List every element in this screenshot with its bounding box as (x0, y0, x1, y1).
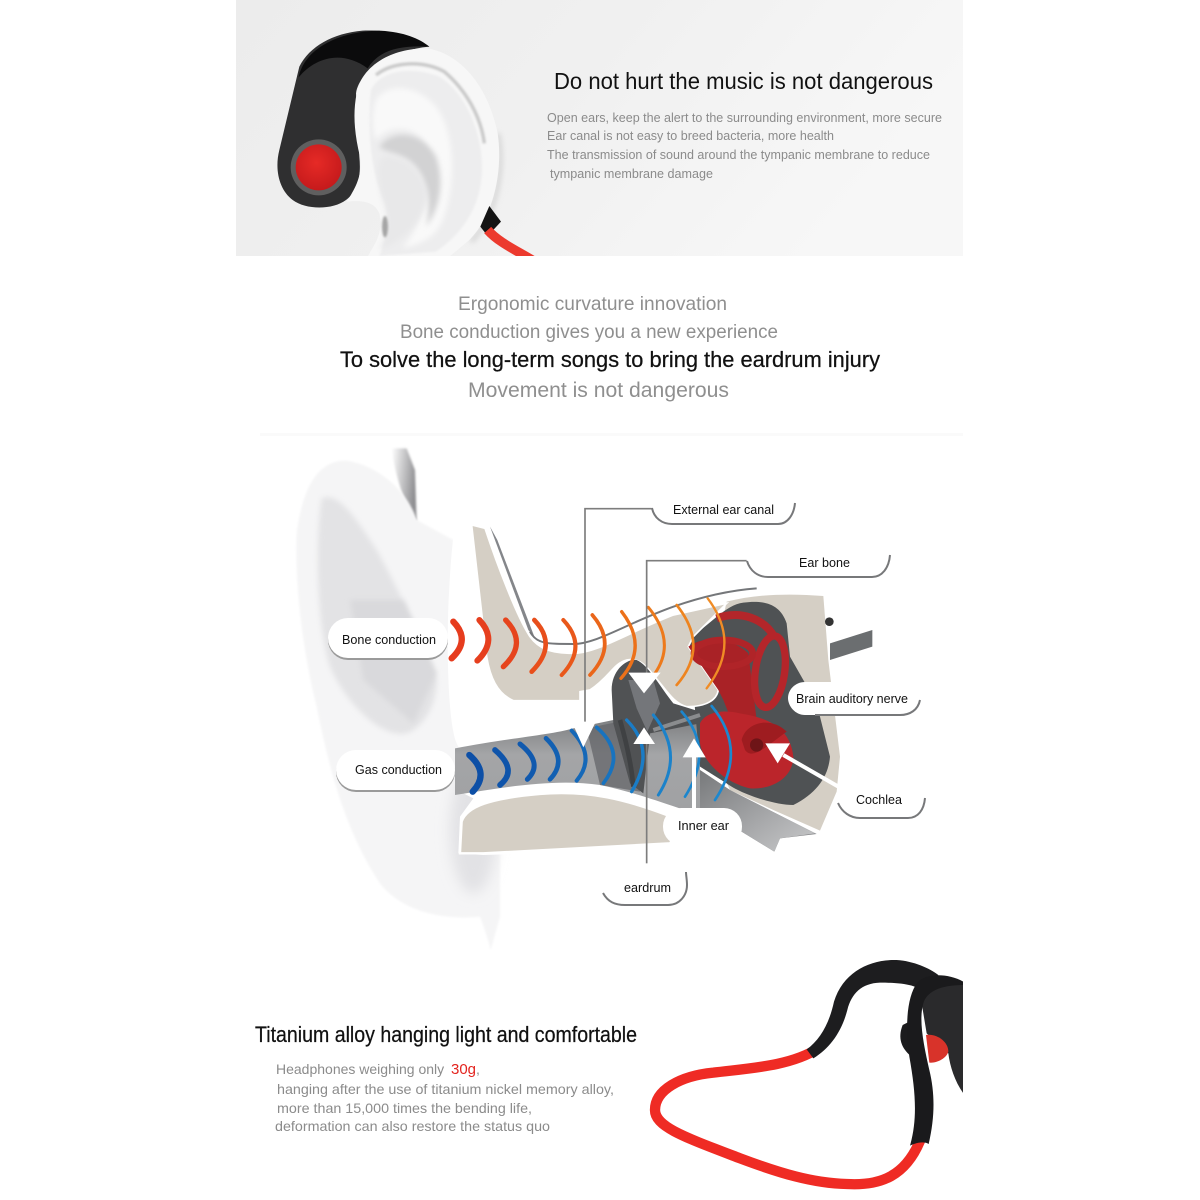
text block: benefits: tympanic membrane damage (550, 167, 713, 181)
panel: ear anatomy diagram (296, 448, 925, 950)
red cable (484, 226, 534, 256)
panel: titanium band (255, 960, 963, 1184)
text block: benefits: The transmission of sound around the tympanic membrane to reduce (547, 148, 930, 162)
haze behind section (450, 767, 497, 893)
black neck section (807, 960, 938, 1058)
ear lobe shadow (382, 216, 388, 237)
arrow: cochlea (765, 743, 838, 787)
label: gas conduction: Gas conduction (355, 763, 442, 777)
arrow: external ear canal (571, 509, 652, 747)
text block: band specs: Headphones weighing only (276, 1061, 444, 1077)
label: eardrum: eardrum (624, 881, 671, 895)
label: external ear canal: External ear canal (673, 503, 774, 517)
ear silhouette (296, 461, 500, 950)
inner ear cavity (687, 602, 830, 805)
black stem (907, 975, 963, 1146)
ear outer rim (347, 48, 499, 257)
red button (291, 139, 347, 195)
image: neckband headset (655, 960, 963, 1184)
label: ear bone: Ear bone (799, 556, 850, 570)
panel: open-ear hero (236, 0, 963, 263)
text block: band specs: more than 15,000 times the bending life, (277, 1100, 532, 1116)
text block: ergonomic headline (340, 293, 880, 402)
image: headphone earpiece on ear (277, 31, 538, 263)
ear section cross-view (448, 509, 872, 863)
vestibule (688, 640, 757, 720)
orange bone-conduction waves (452, 598, 724, 688)
label: bone conduction: Bone conduction (342, 633, 436, 647)
concha floor (378, 157, 426, 250)
neck shadow (392, 448, 417, 522)
earpiece body (277, 31, 429, 207)
red button side (926, 1035, 948, 1063)
auricle line (530, 588, 757, 644)
text block: band specs (275, 1061, 614, 1134)
label: cochlea (838, 785, 925, 818)
text block: ergonomic headline: Movement is not dangerous (468, 379, 729, 402)
right temporal bone (700, 595, 840, 831)
helix inner line (376, 64, 484, 143)
cochlea (700, 711, 793, 788)
cable sleeve (480, 206, 501, 232)
scapha shading (318, 497, 437, 734)
inner canal shade (587, 720, 640, 792)
stapes rod (653, 715, 700, 730)
text block: band specs: , (476, 1061, 480, 1077)
semicircular canals (717, 615, 775, 638)
label: brain auditory nerve: Brain auditory nerve (796, 692, 908, 706)
big ear illustration (296, 448, 500, 950)
heading: titanium alloy: Titanium alloy hanging light and comfortable (255, 1022, 637, 1047)
concha top shade (379, 135, 440, 227)
arrow: ear bone (628, 561, 747, 693)
label: ear bone (747, 555, 890, 577)
text block: ergonomic headline: To solve the long-term songs to bring the eardrum injury (340, 347, 880, 372)
label: bone conduction (328, 618, 448, 660)
concha shading (350, 600, 437, 723)
text block: ergonomic headline: Ergonomic curvature innovation (458, 293, 727, 315)
cochlea spiral (742, 723, 787, 754)
upper temporal bone (472, 525, 727, 707)
ear rim shadow (471, 133, 500, 242)
text block: benefits: Open ears, keep the alert to the surrounding environment, more secure (547, 111, 942, 125)
red labyrinth (688, 615, 793, 788)
auditory nerve (825, 617, 872, 660)
label: brain auditory nerve (788, 682, 920, 715)
tympanic membrane (620, 720, 633, 787)
heading: do not hurt: Do not hurt the music is not dangerous (554, 68, 933, 94)
lower bone (460, 793, 683, 853)
earpiece left lobe (900, 1022, 910, 1055)
arrow: inner ear (683, 738, 706, 810)
label: inner ear (663, 808, 742, 845)
label: eardrum (603, 872, 687, 905)
ear inner shading (370, 71, 482, 256)
ear canal (455, 713, 817, 852)
label: external ear canal (652, 503, 795, 524)
text block: ergonomic headline: Bone conduction gives you a new experience (400, 321, 778, 343)
arrow: eardrum (633, 727, 655, 863)
text block: band specs: deformation can also restore the status quo (275, 1118, 550, 1134)
antihelix (373, 88, 452, 248)
blue air-conduction waves (469, 706, 731, 800)
skin fold (490, 527, 535, 638)
red band (655, 1048, 922, 1184)
label: cochlea: Cochlea (856, 793, 902, 807)
text block: band specs: hanging after the use of titanium nickel memory alloy, (277, 1081, 614, 1097)
middle ear cavity (612, 660, 700, 793)
label: inner ear: Inner ear (678, 819, 729, 833)
white section base (448, 514, 842, 855)
earpiece gloss (299, 31, 429, 77)
text block: benefits (547, 111, 942, 181)
label: gas conduction (336, 750, 455, 792)
text block: benefits: Ear canal is not easy to breed bacteria, more health (547, 129, 834, 143)
ossicles (628, 680, 660, 732)
earpiece inner (922, 985, 963, 1093)
text block: band specs: 30g (451, 1061, 476, 1078)
lower gray band (700, 770, 815, 852)
